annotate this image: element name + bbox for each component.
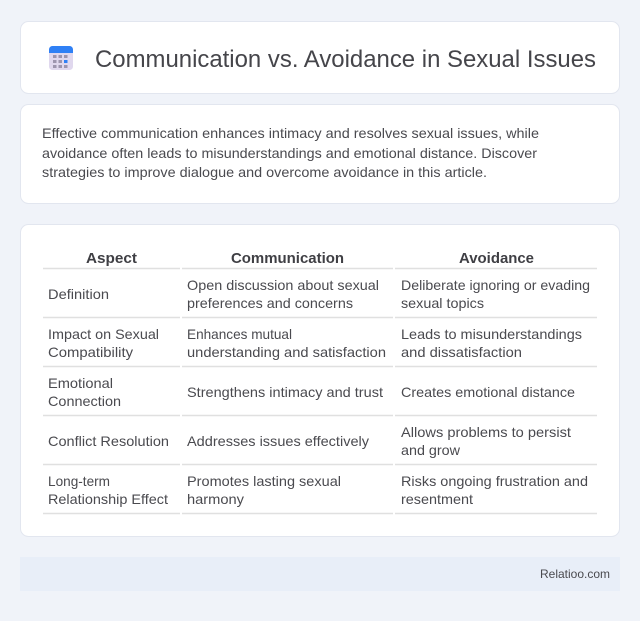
row: definition: preferences and concerns — [187, 295, 353, 311]
table header: Aspect — [86, 250, 137, 267]
row: emotional connection: Strengthens intimacy and trust — [187, 384, 383, 400]
footer — [20, 557, 620, 591]
row: conflict resolution — [48, 424, 571, 458]
panel: comparison table — [20, 224, 620, 536]
footer credit: Relatioo.com — [540, 567, 610, 581]
row: impact on sexual compatibility — [48, 326, 582, 360]
panel: title header — [20, 22, 620, 94]
row: definition — [48, 277, 590, 311]
row: impact on sexual compatibility: understanding and satisfaction — [187, 344, 386, 360]
row: impact on sexual compatibility: Enhances mutual — [187, 326, 292, 342]
intro paragraph: Effective communication enhances intimacy and resolves sexual issues, while — [42, 125, 539, 141]
row: emotional connection: Connection — [48, 393, 121, 409]
row: definition: Open discussion about sexual — [187, 277, 379, 293]
icon: calendar — [49, 46, 73, 70]
intro paragraph: avoidance often leads to misunderstandings and emotional distance. Discover — [42, 145, 537, 161]
row: impact on sexual compatibility: Leads to misunderstandings — [401, 326, 582, 342]
row: long-term relationship effect: Relationship Effect — [48, 491, 168, 507]
row: long-term relationship effect: Risks ongoing frustration and — [401, 473, 588, 489]
row: definition: Definition — [48, 286, 109, 302]
intro paragraph — [42, 125, 539, 180]
row: conflict resolution: Addresses issues effectively — [187, 433, 369, 449]
table header — [86, 250, 534, 267]
row: conflict resolution: Allows problems to persist — [401, 424, 571, 440]
row: impact on sexual compatibility: Compatibility — [48, 344, 133, 360]
intro paragraph: strategies to improve dialogue and overcome avoidance in this article. — [42, 164, 487, 180]
row: conflict resolution: and grow — [401, 442, 461, 458]
row: impact on sexual compatibility: Impact on Sexual — [48, 326, 159, 342]
row: definition: sexual topics — [401, 295, 484, 311]
row: long-term relationship effect: resentment — [401, 491, 473, 507]
table header: Communication — [231, 250, 344, 267]
panel: introduction — [20, 104, 620, 204]
row: long-term relationship effect: harmony — [187, 491, 244, 507]
row: emotional connection — [48, 375, 575, 409]
row: long-term relationship effect — [48, 473, 588, 507]
title: Communication vs. Avoidance in Sexual Issues — [95, 46, 596, 73]
row: impact on sexual compatibility: and dissatisfaction — [401, 344, 522, 360]
row: long-term relationship effect: Long-term — [48, 473, 110, 489]
row: long-term relationship effect: Promotes lasting sexual — [187, 473, 341, 489]
row: conflict resolution: Conflict Resolution — [48, 433, 169, 449]
table header: Avoidance — [459, 250, 534, 267]
row: definition: Deliberate ignoring or evading — [401, 277, 590, 293]
row: emotional connection: Emotional — [48, 375, 113, 391]
row: emotional connection: Creates emotional distance — [401, 384, 575, 400]
